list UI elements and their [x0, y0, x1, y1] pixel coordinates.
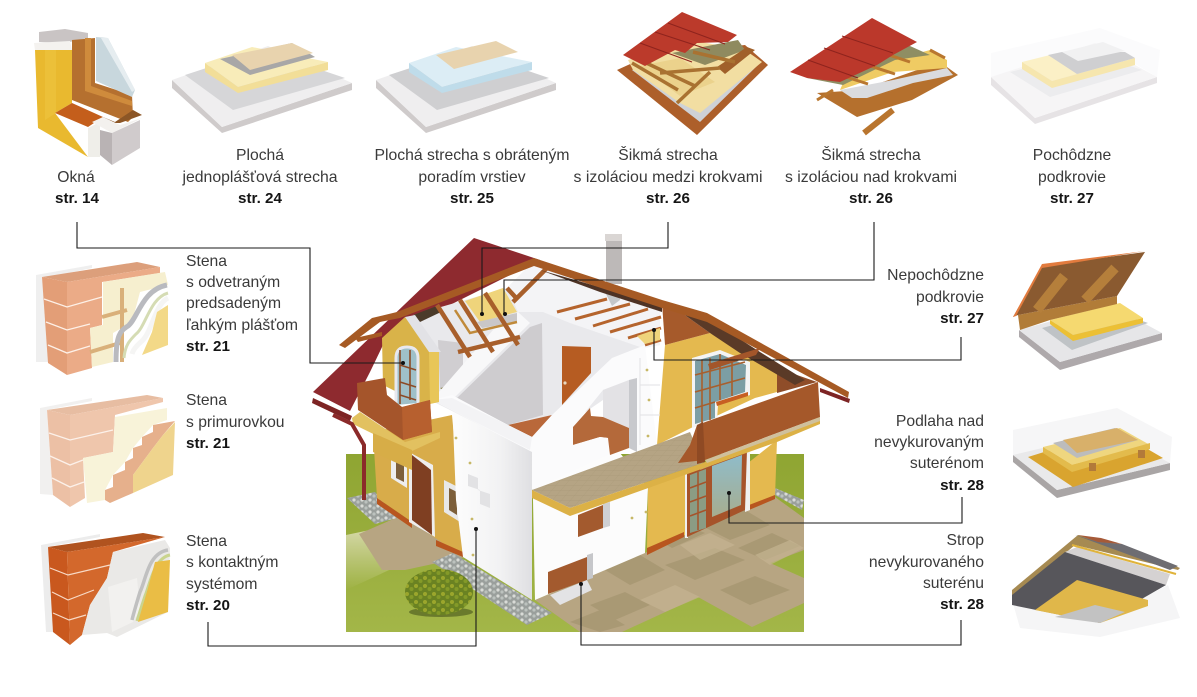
- label: pitched roof above rafters: Šikmá strecha: [821, 145, 921, 164]
- label: walkable attic: podkrovie: [1038, 169, 1106, 186]
- thumbnail: walkable attic: [991, 28, 1160, 124]
- label: ventilated wall: Stena: [186, 253, 227, 270]
- lower right wall: [532, 438, 777, 605]
- thumbnail: flat single-skin roof: [172, 43, 352, 133]
- left yellow wall: [373, 415, 470, 557]
- left white insulation wall: [452, 398, 532, 600]
- label: flat single-skin roof: str. 24: [238, 190, 283, 207]
- label: floor over basement: nevykurovaným: [874, 434, 984, 451]
- label: pitched roof between rafters: s izoláciou medzi krokvami: [574, 169, 762, 186]
- house illustration: [312, 234, 850, 632]
- label: basement ceiling: Strop: [946, 532, 984, 549]
- label: facing brick wall: str. 21: [186, 435, 230, 452]
- label: floor over basement: suterénom: [910, 455, 984, 472]
- insulation panels and dowels: [455, 358, 660, 556]
- label: inverted flat roof: str. 25: [450, 190, 495, 207]
- label: ventilated wall: predsadeným: [186, 295, 281, 312]
- thumbnail: wall with facing brick: [40, 395, 175, 507]
- label: inverted flat roof: Plochá strecha s obráteným: [374, 147, 570, 164]
- thumbnail: pitched roof, insulation between rafters: [617, 12, 768, 135]
- label: walkable attic: Pochôdzne: [1033, 147, 1112, 164]
- label: non-walkable attic: str. 27: [940, 310, 984, 327]
- label: flat single-skin roof: jednoplášťová strecha: [181, 169, 338, 186]
- dormer: [312, 315, 441, 500]
- label: contact system wall: s kontaktným: [186, 554, 278, 571]
- label: pitched roof above rafters: s izoláciou nad krokvami: [785, 169, 957, 186]
- label: floor over basement: str. 28: [940, 477, 984, 494]
- thumbnail: inverted flat roof: [376, 41, 556, 133]
- label: floor over basement: Podlaha nad: [896, 413, 984, 430]
- label: pitched roof between rafters: Šikmá strecha: [618, 145, 718, 164]
- thumbnail: wall with ventilated curtain: [36, 262, 168, 375]
- label: pitched roof between rafters: str. 26: [646, 190, 690, 207]
- label: windows: str. 14: [55, 190, 100, 207]
- right upper window: [692, 348, 760, 428]
- right balcony: [532, 382, 820, 516]
- label: contact system wall: Stena: [186, 533, 227, 550]
- label: pitched roof above rafters: str. 26: [849, 190, 893, 207]
- label: ventilated wall: ľahkým plášťom: [186, 317, 298, 334]
- label: contact system wall: str. 20: [186, 597, 230, 614]
- label: flat single-skin roof: Plochá: [236, 147, 284, 164]
- label: basement ceiling: str. 28: [940, 596, 984, 613]
- bush: [405, 569, 473, 617]
- label: facing brick wall: Stena: [186, 392, 227, 409]
- attic joists and insulation: [437, 267, 661, 357]
- thumbnail: floor above unheated basement: [1013, 408, 1172, 498]
- label: facing brick wall: s primurovkou: [186, 414, 285, 431]
- interior rooms and door: [432, 312, 657, 490]
- upper right wall and roof fascia: [339, 258, 850, 445]
- thumbnail: pitched roof, insulation above rafters: [790, 18, 958, 133]
- thumbnail: wall with contact system: [41, 533, 170, 645]
- red roof: [313, 238, 540, 411]
- label: non-walkable attic: podkrovie: [916, 289, 984, 306]
- label: windows: Okná: [57, 169, 95, 186]
- attic back and ceiling: [413, 262, 660, 450]
- label: contact system wall: systémom: [186, 576, 257, 593]
- label: inverted flat roof: poradím vrstiev: [418, 169, 526, 186]
- leader lines: [77, 222, 962, 646]
- label: non-walkable attic: Nepochôdzne: [887, 267, 984, 284]
- label: basement ceiling: nevykurovaného: [869, 554, 984, 571]
- thumbnail: window section: [34, 29, 142, 165]
- thumbnail: ceiling of unheated basement: [1012, 535, 1180, 637]
- thumbnail: non-walkable attic: [1013, 251, 1162, 370]
- label: basement ceiling: suterénu: [923, 575, 984, 592]
- label: ventilated wall: str. 21: [186, 338, 230, 355]
- chimney: [605, 234, 622, 284]
- ground: [346, 454, 804, 632]
- label: ventilated wall: s odvetraným: [186, 274, 280, 291]
- label: walkable attic: str. 27: [1050, 190, 1094, 207]
